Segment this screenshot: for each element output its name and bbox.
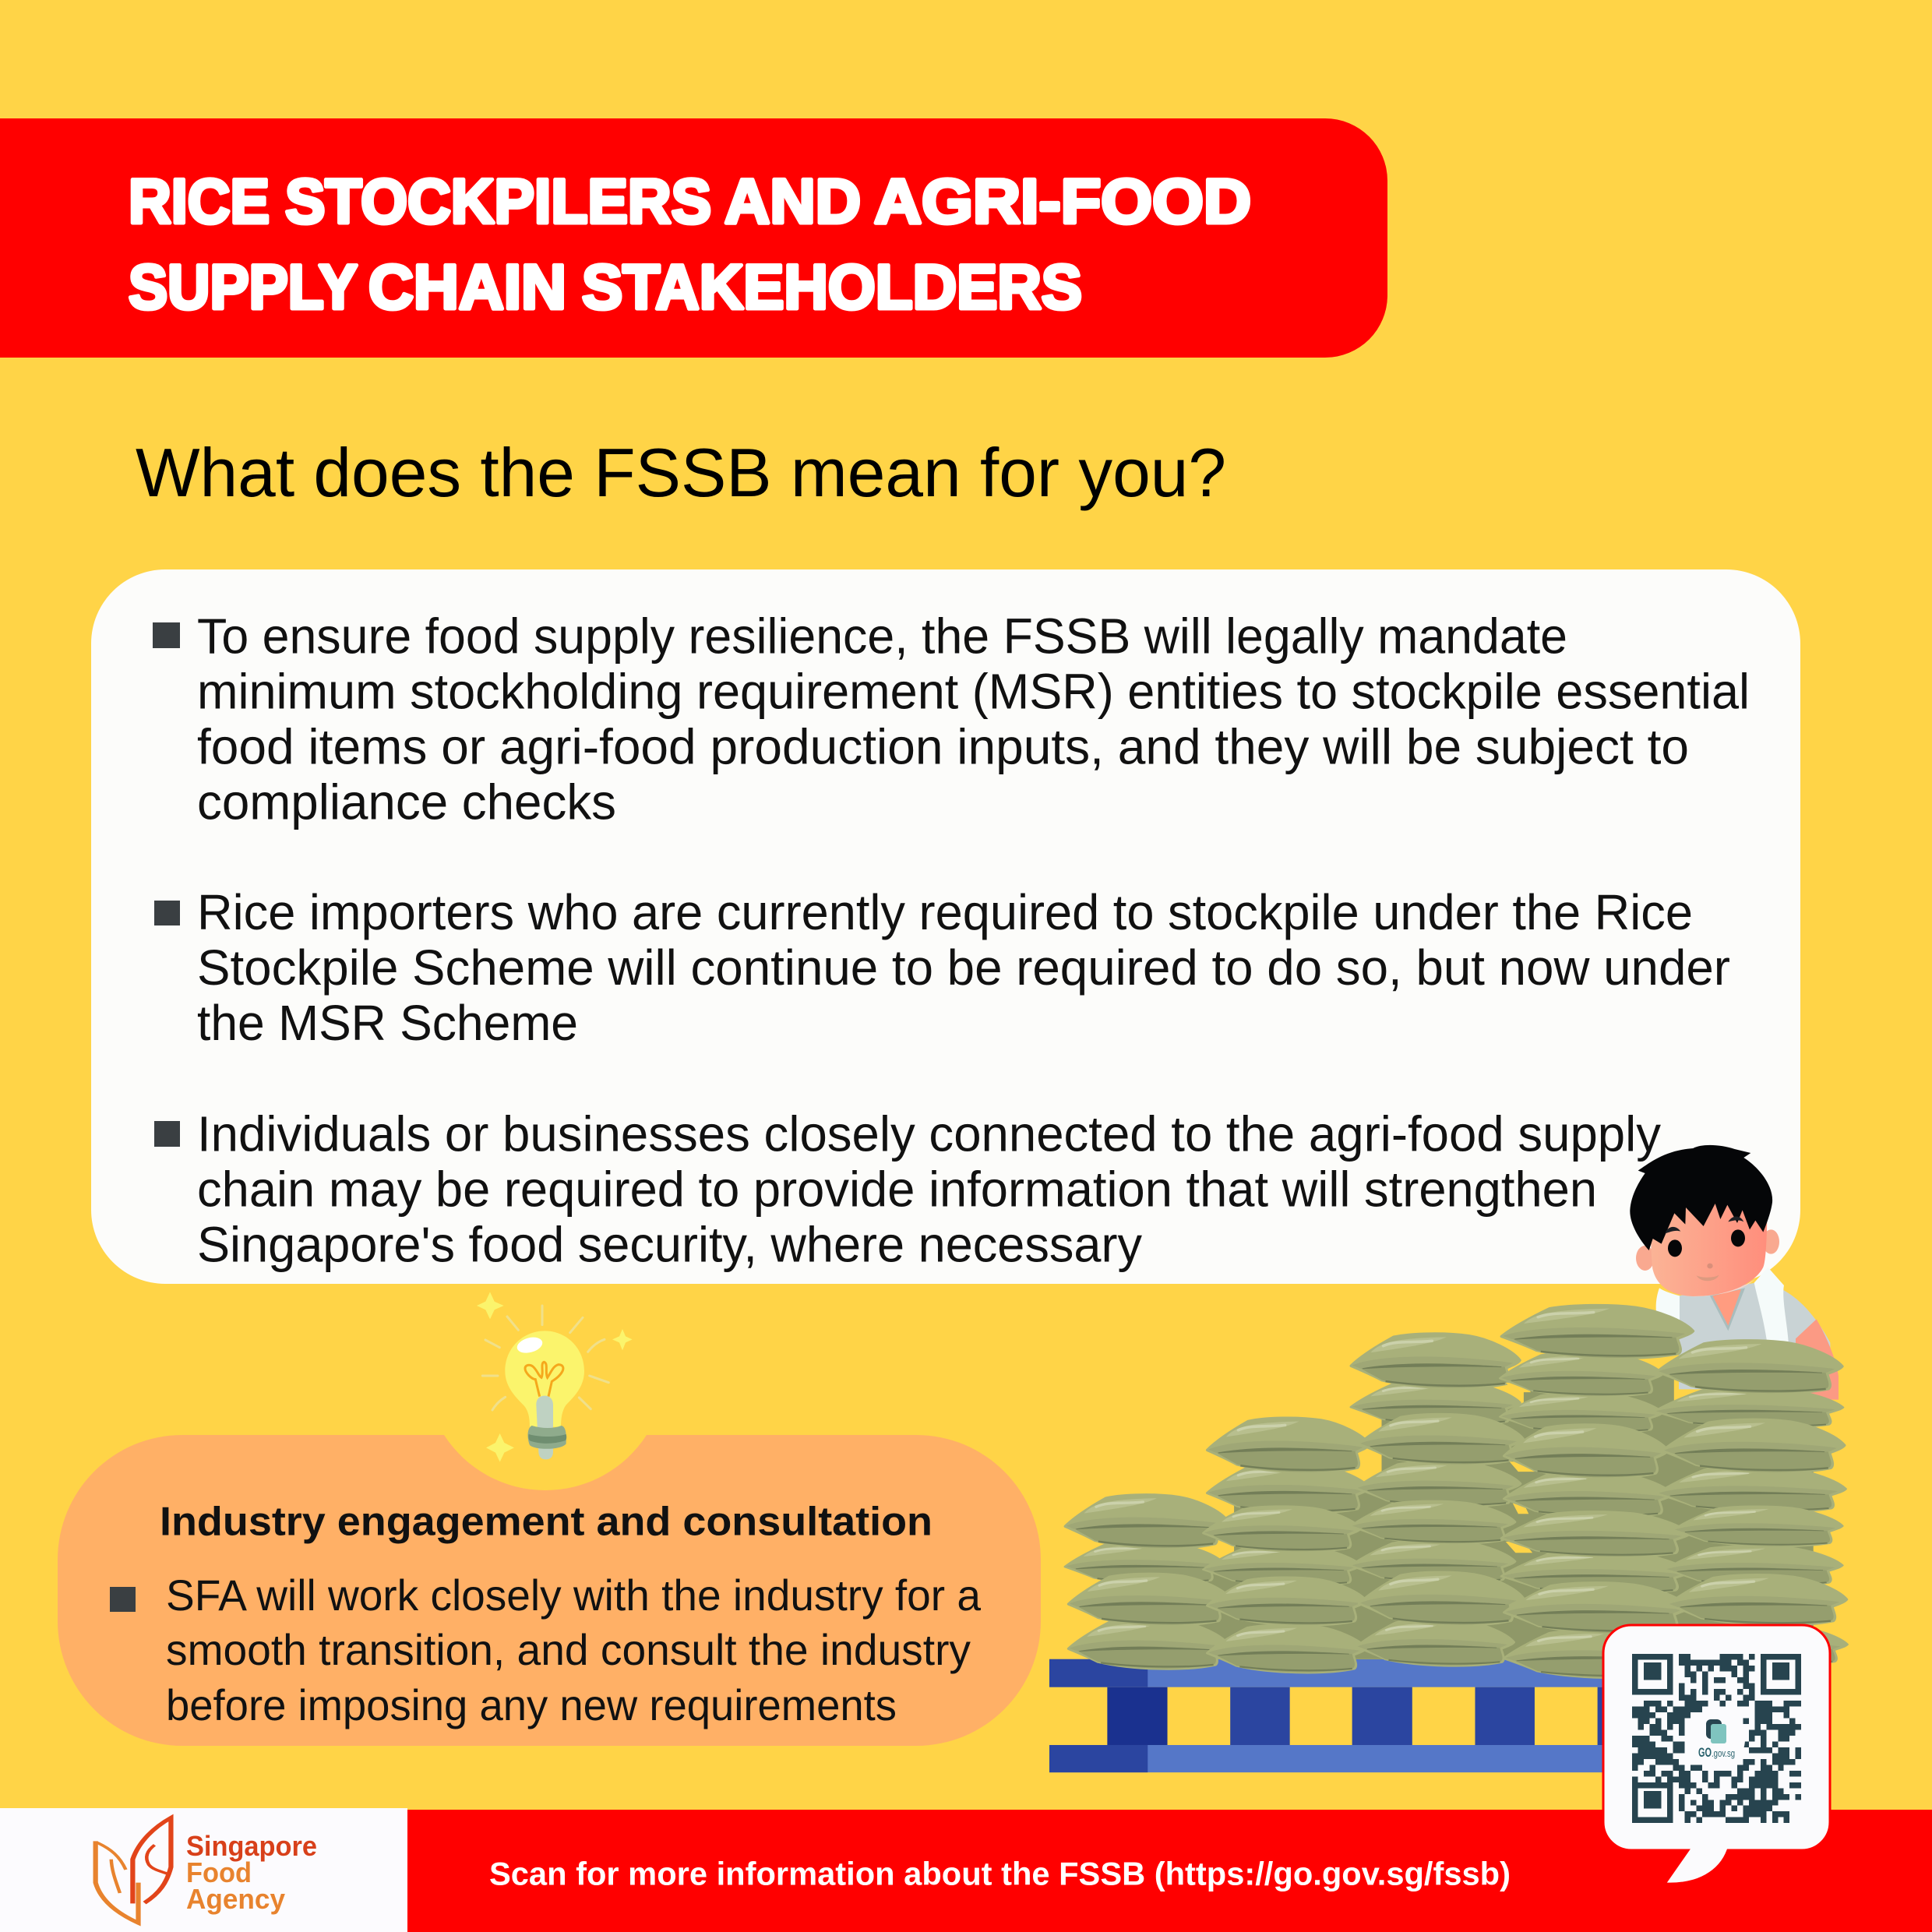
panel heading: Industry engagement and consultation: [160, 1499, 933, 1544]
QR centre logo: [1687, 1711, 1745, 1768]
sack column 3: [1351, 1334, 1523, 1666]
footer bar: [407, 1810, 1932, 1932]
QR centre logo: .gov.sg: [1712, 1747, 1735, 1759]
footer text: Scan for more information about the FSSB (https://go.gov.sg/fssb): [489, 1856, 1511, 1891]
illustration: boy: [1630, 1145, 1839, 1433]
title banner: STOCKPILERS: [285, 167, 711, 237]
logo text: Singapore: [186, 1830, 317, 1862]
QR code: [1632, 1657, 1801, 1820]
title banner: STAKEHOLDERS: [582, 252, 1082, 323]
bullet text: before imposing any new requirements: [166, 1680, 897, 1729]
illustration: pallet: [1049, 1659, 1640, 1772]
bullet 3: [154, 1106, 1661, 1273]
towel: [1656, 1267, 1789, 1345]
face: [1649, 1182, 1767, 1296]
icon: light bulb: [477, 1292, 633, 1462]
logo text: [186, 1830, 317, 1915]
bullet 3: Singapore's food security, where necessary: [197, 1217, 1142, 1273]
bullet 3: Individuals or businesses closely connected to the agri-food supply: [197, 1106, 1661, 1162]
logo text: Agency: [186, 1883, 285, 1915]
title banner: [0, 118, 1387, 358]
bullet 2: [154, 884, 1730, 1051]
bullet 1: minimum stockholding requirement (MSR) entities to stockpile essential: [197, 664, 1750, 720]
bullet text: SFA will work closely with the industry for a: [166, 1571, 982, 1620]
bullet 2: Rice importers who are currently required to stockpile under the Rice: [197, 884, 1693, 940]
bullet text: smooth transition, and consult the industry: [166, 1625, 971, 1674]
bullet 2: the MSR Scheme: [197, 995, 578, 1051]
yellow gaps between sack columns: [1506, 1383, 1535, 1553]
hair: [1630, 1145, 1772, 1250]
sack column 2: [1204, 1418, 1370, 1673]
QR centre logo: GO: [1698, 1745, 1712, 1760]
footer logo: Singapore Food Agency: [0, 1808, 407, 1932]
panel: industry engagement: [58, 1435, 1041, 1746]
title banner: AGRI-FOOD: [874, 167, 1251, 237]
neck: [1710, 1288, 1745, 1331]
icon: leaf logo: [96, 1817, 171, 1923]
sack column 1: [1065, 1495, 1231, 1669]
title banner: RICE: [129, 167, 270, 237]
title banner: AND: [724, 167, 861, 237]
heading: What does the FSSB mean for you?: [136, 434, 1226, 511]
bullet 2: Stockpile Scheme will continue to be required to do so, but now under: [197, 940, 1730, 996]
bullet 1: To ensure food supply resilience, the FSSB will legally mandate: [197, 608, 1567, 664]
shirt: [1679, 1283, 1831, 1389]
eyes: [1668, 1239, 1682, 1257]
logo text: Food: [186, 1856, 252, 1888]
QR code speech bubble: [1603, 1625, 1830, 1884]
bullet 1: food items or agri-food production inputs, and they will be subject to: [197, 718, 1689, 774]
title banner: SUPPLY: [129, 252, 358, 323]
sack column 4: [1500, 1306, 1693, 1678]
sack column 5: [1655, 1341, 1847, 1665]
bullet 3: chain may be required to provide information that will strengthen: [197, 1161, 1597, 1217]
panel: key points: [91, 569, 1800, 1284]
bullet 1: [153, 608, 1750, 830]
bullet text: [110, 1571, 982, 1729]
peach peeks: [1652, 1391, 1676, 1433]
bullet 1: compliance checks: [197, 774, 616, 830]
nose: [1707, 1264, 1713, 1268]
illustration: stacked rice sacks: [1065, 1306, 1847, 1678]
title banner: CHAIN: [368, 252, 566, 323]
arm: [1796, 1319, 1839, 1400]
mouth: [1697, 1275, 1719, 1281]
ears: [1636, 1246, 1654, 1271]
eyebrows: [1665, 1216, 1743, 1233]
